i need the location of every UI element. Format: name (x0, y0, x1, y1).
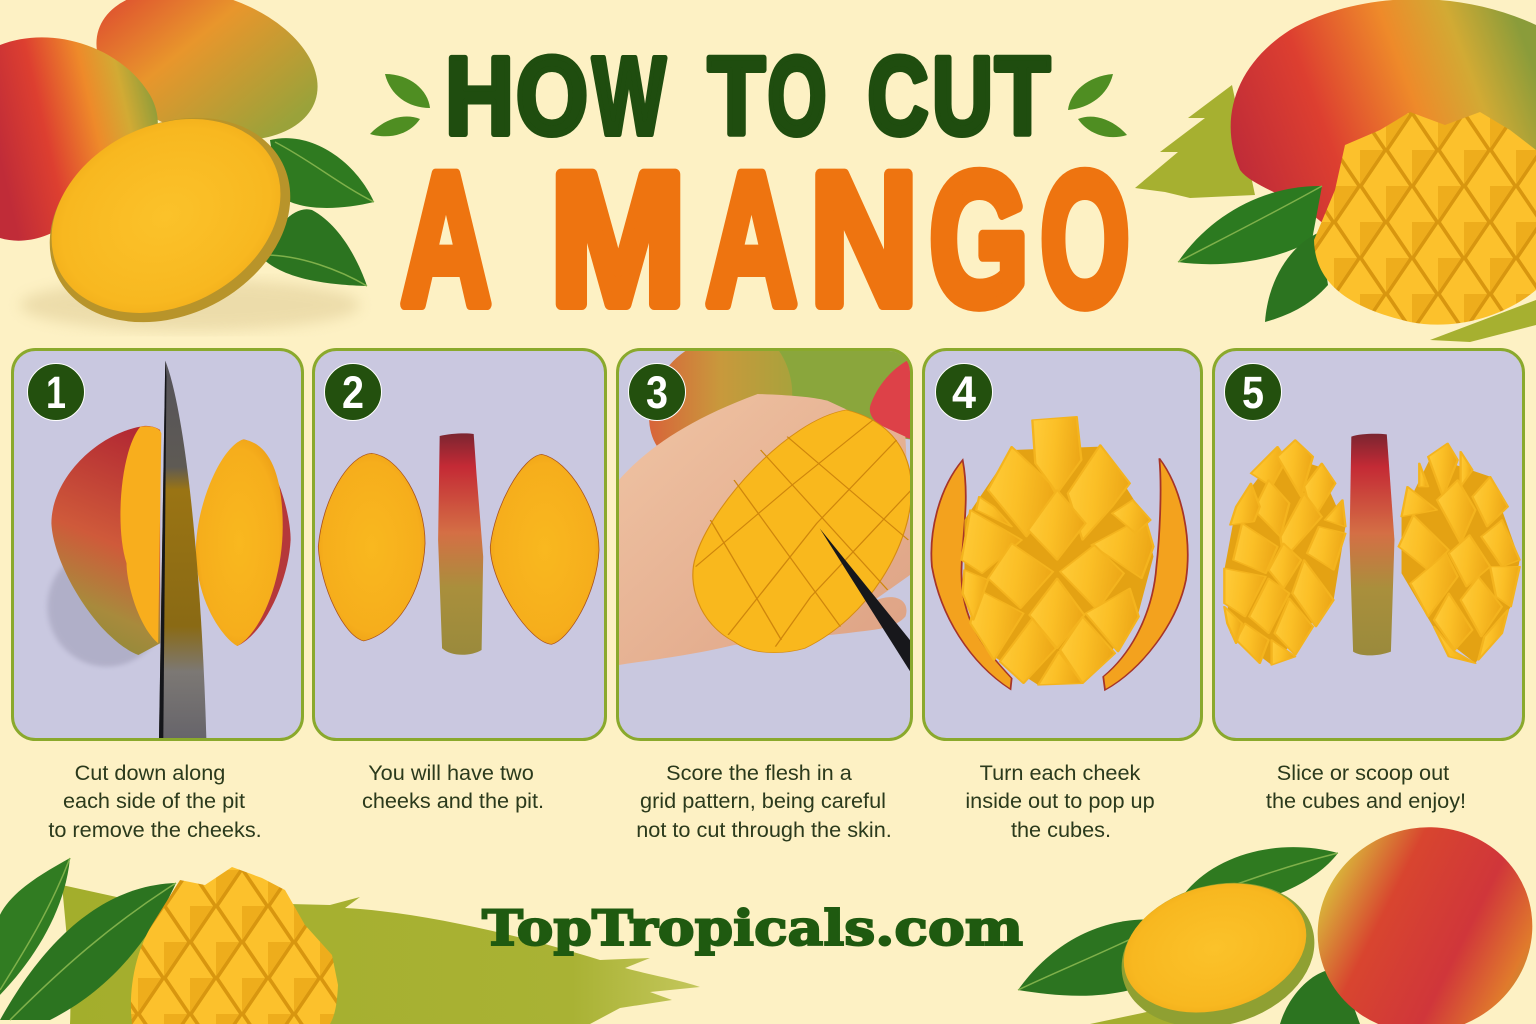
badge 3 (628, 364, 686, 420)
mango flesh (120, 426, 161, 643)
caption 5: Slice or scoop out (1277, 760, 1449, 785)
leaf (0, 883, 176, 1020)
title line 2: M (550, 134, 686, 344)
caption 1 (48, 760, 262, 842)
panel 1 (12, 350, 302, 740)
hand (619, 394, 912, 665)
title line 1: T (995, 35, 1050, 158)
background mangoes (775, 350, 914, 440)
cube backing (964, 447, 1153, 685)
leaf (0, 858, 70, 1000)
panel 5 (1214, 350, 1524, 740)
leaf (1175, 847, 1338, 909)
brand: TopTropicals.com (482, 899, 1023, 957)
caption 2 (362, 760, 544, 813)
skin left (931, 460, 1012, 689)
caption 3: grid pattern, being careful (640, 788, 886, 813)
panel 3 (618, 350, 914, 740)
badge 1: 1 (46, 367, 66, 418)
badge 4: 4 (952, 367, 976, 418)
caption 2: You will have two (368, 760, 534, 785)
title leaves left (370, 74, 430, 136)
bottom-left brush stroke (62, 885, 700, 1024)
badge 2: 2 (342, 367, 364, 418)
caption 3: Score the flesh in a (666, 760, 853, 785)
cheek left (318, 453, 425, 641)
brush stroke (1135, 85, 1536, 342)
caption 5 (1266, 760, 1466, 813)
caption 1: Cut down along (75, 760, 225, 785)
scored cheek (693, 410, 911, 653)
skin right (1103, 458, 1188, 690)
caption 1: to remove the cheeks. (48, 817, 262, 842)
cheek flesh (196, 439, 283, 646)
leaf (1018, 919, 1160, 996)
cheek right (490, 454, 599, 644)
badge 1 (28, 364, 84, 420)
knife (820, 528, 911, 673)
cheek skin (237, 439, 291, 646)
badge 3: 3 (646, 367, 668, 418)
top-left mango group (0, 0, 374, 362)
score lines (696, 420, 911, 647)
brush stroke (1090, 1005, 1200, 1024)
caption 4 (965, 760, 1155, 842)
title line 1: H (445, 35, 514, 158)
leaf (1280, 969, 1360, 1024)
leaf (270, 138, 374, 208)
leaf (1265, 232, 1328, 322)
caption 5: the cubes and enjoy! (1266, 788, 1466, 813)
caption 3 (636, 760, 892, 842)
caption 2: cheeks and the pit. (362, 788, 544, 813)
badge 5 (1224, 364, 1282, 420)
title line 2: A (706, 134, 797, 344)
half mango flesh (1109, 864, 1321, 1024)
mango half skin (15, 78, 325, 362)
caption 4: the cubes. (1011, 817, 1111, 842)
mango body (51, 426, 160, 655)
bottom-right mango group (1018, 797, 1536, 1024)
top-right mango group (1135, 0, 1536, 342)
mango half flesh (18, 81, 314, 351)
title line 2 (401, 134, 1130, 344)
knife (159, 361, 206, 740)
title line 1 (445, 35, 1050, 158)
mango back (77, 0, 337, 167)
shadow (46, 566, 162, 668)
badge 4 (936, 364, 992, 420)
pit slice (1350, 434, 1394, 655)
title line 1: T (708, 35, 765, 158)
title line 2: G (930, 134, 1028, 344)
title line 2: A (401, 134, 491, 344)
caption 3: not to cut through the skin. (636, 817, 892, 842)
panel 2 (314, 350, 606, 740)
title line 1: U (932, 35, 993, 158)
title line 2: N (810, 134, 918, 344)
mango left (0, 37, 158, 241)
leaf (262, 209, 367, 286)
pit slice (438, 433, 483, 655)
badge 5: 5 (1242, 367, 1264, 418)
caption 4: inside out to pop up (965, 788, 1155, 813)
whole mango (1289, 797, 1536, 1024)
leaf (1178, 186, 1322, 264)
cubed half (1314, 112, 1536, 325)
caption 1: each side of the pit (63, 788, 245, 813)
cubed cheek right (1399, 443, 1520, 663)
title (370, 35, 1130, 344)
title leaves right (1068, 74, 1127, 137)
panel 4 (924, 350, 1202, 740)
cubed cheek left (1224, 440, 1345, 665)
whole mango (1231, 0, 1536, 240)
title line 1: W (592, 35, 666, 158)
cubed mango (131, 867, 338, 1024)
title line 1: O (768, 35, 826, 158)
title line 1: C (868, 35, 928, 158)
badge 2 (324, 364, 382, 420)
title line 1: O (516, 35, 588, 158)
cubes (961, 417, 1153, 685)
caption 4: Turn each cheek (980, 760, 1141, 785)
bottom-left leaves and cubes (0, 858, 338, 1024)
half mango skin (1105, 862, 1331, 1024)
title line 2: O (1040, 134, 1130, 344)
